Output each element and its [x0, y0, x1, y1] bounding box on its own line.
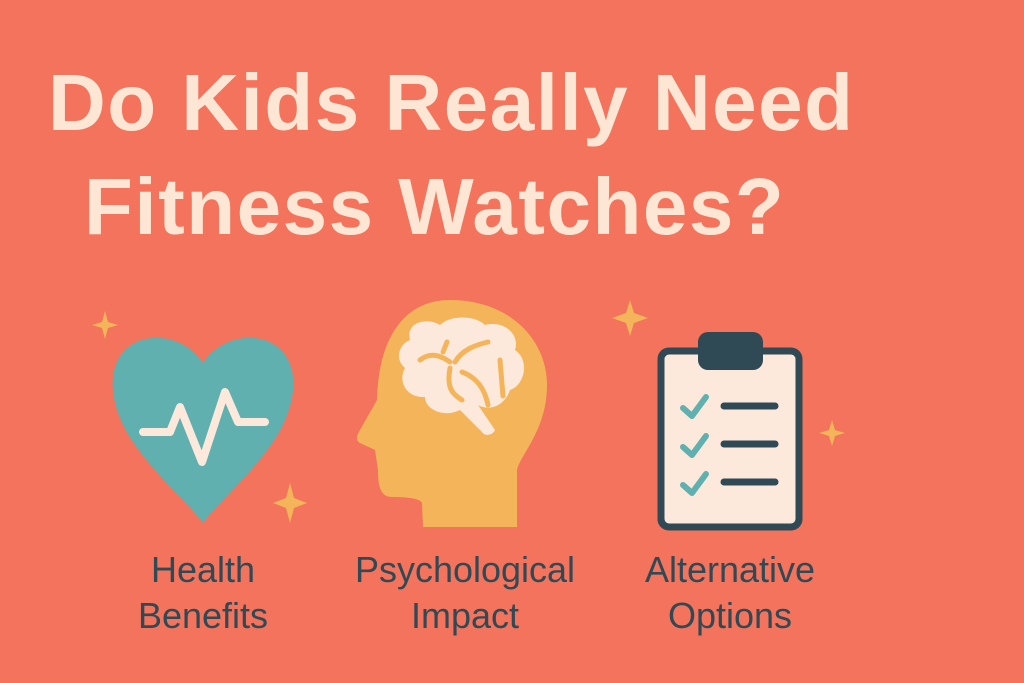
- icon: heart with pulse: [113, 338, 293, 523]
- label: health benefits: Health: [151, 549, 255, 590]
- label: alternative options: Options: [668, 595, 792, 636]
- label: alternative options: Alternative: [645, 549, 815, 590]
- label: health benefits: Benefits: [138, 595, 268, 636]
- title: Do Kids Really Need: [48, 58, 855, 147]
- label: health benefits: [138, 549, 268, 636]
- title: Fitness Watches?: [84, 162, 785, 251]
- label: alternative options: [645, 549, 815, 636]
- icon: head with brain: [357, 300, 547, 527]
- icon: sparkles: [92, 300, 845, 523]
- icon: clipboard checklist: [661, 332, 799, 527]
- label: psychological impact: Impact: [411, 595, 519, 636]
- label: psychological impact: Psychological: [355, 549, 575, 590]
- title: [48, 58, 855, 251]
- label: psychological impact: [355, 549, 575, 636]
